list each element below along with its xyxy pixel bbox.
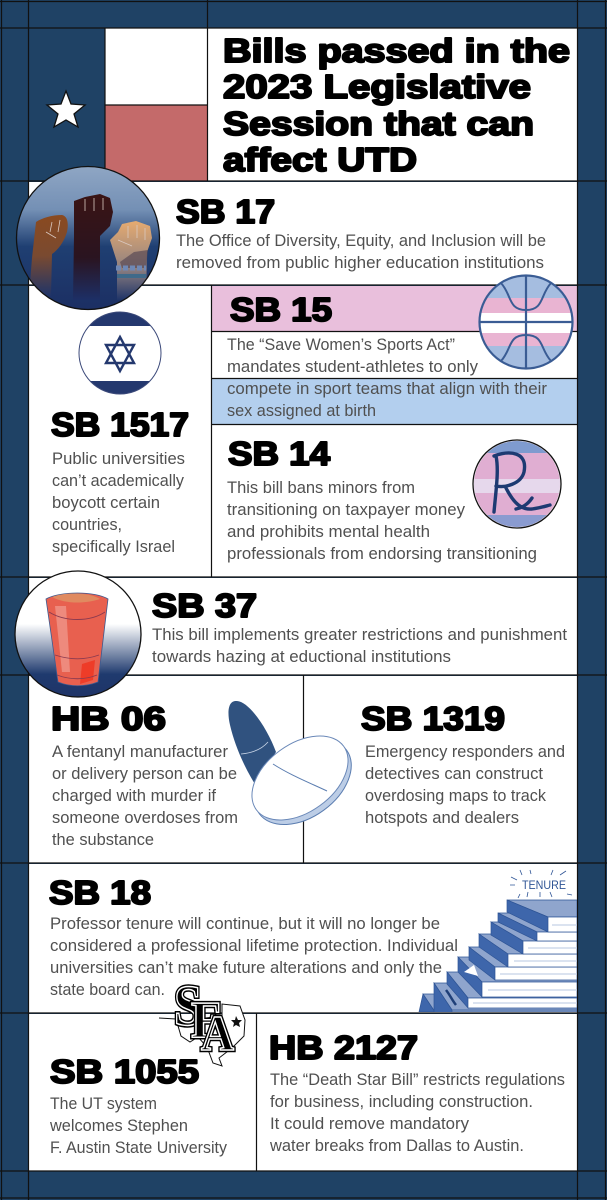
panel: HB 06: the substance bbox=[52, 830, 154, 849]
panel: SB 1319: hotspots and dealers bbox=[365, 808, 519, 827]
panel: SB 1055 bbox=[49, 1053, 227, 1157]
panel: title: Session that can bbox=[223, 105, 534, 142]
icon: star bbox=[47, 91, 85, 127]
panel: title bbox=[208, 28, 577, 181]
panel: HB 2127: It could remove mandatory bbox=[270, 1114, 469, 1133]
panel: SB 18: state board can. bbox=[50, 980, 165, 999]
panel: Texas flag bbox=[47, 28, 207, 181]
panel: title: affect UTD bbox=[223, 141, 417, 178]
panel: title: Bills passed in the bbox=[223, 32, 570, 69]
icon: SFA logo: A bbox=[201, 1005, 234, 1061]
icon: SFA logo bbox=[159, 973, 245, 1066]
panel: SB 14: This bill bans minors from bbox=[227, 478, 415, 497]
icon: SFA logo: F bbox=[191, 992, 221, 1049]
panel: SB 1517 bbox=[51, 305, 189, 556]
panel: SB 17: The Office of Diversity, Equity, and Inclusion will be bbox=[176, 231, 546, 250]
panel: SB 37: towards hazing at eductional institutions bbox=[152, 647, 451, 666]
panel: SB 15: SB 15 bbox=[230, 291, 332, 328]
panel: SB 14 bbox=[227, 435, 565, 563]
panel: HB 06: HB 06 bbox=[51, 700, 166, 737]
panel: SB 17: removed from public higher education institutions bbox=[176, 253, 544, 272]
panel: SB 14: professionals from endorsing transitioning bbox=[227, 544, 537, 563]
panel: HB 06: someone overdoses from bbox=[52, 808, 238, 827]
panel: SB 1517: can’t academically bbox=[52, 471, 184, 490]
icon: stack of books with tenure bbox=[419, 870, 577, 1013]
panel: SB 14: SB 14 bbox=[228, 435, 331, 472]
panel: title: 2023 Legislative bbox=[223, 68, 531, 105]
icon: SFA logo: S bbox=[174, 973, 202, 1038]
panel: SB 37: SB 37 bbox=[152, 587, 257, 624]
panel: SB 14: and prohibits mental health bbox=[227, 522, 430, 541]
panel: HB 2127 bbox=[269, 1029, 565, 1155]
panel: SB 18: universities can’t make future alterations and only the bbox=[50, 958, 442, 977]
panel: SB 1319: SB 1319 bbox=[361, 700, 505, 737]
panel: HB 2127: HB 2127 bbox=[269, 1029, 418, 1066]
panel: SB 15: The “Save Women’s Sports Act” bbox=[227, 335, 455, 354]
panel: SB 1517: countries, bbox=[52, 515, 122, 534]
panel: HB 2127: water breaks from Dallas to Austin. bbox=[269, 1136, 524, 1155]
panel: SB 15 bbox=[227, 276, 574, 420]
panel: SB 18: considered a professional lifetime protection. Individual bbox=[50, 936, 458, 955]
panel: SB 15: mandates student-athletes to only bbox=[227, 357, 478, 376]
icon: Rx symbol bbox=[470, 440, 565, 530]
panel: HB 2127: for business, including construction. bbox=[270, 1092, 533, 1111]
bottom-most book first bbox=[423, 994, 577, 1012]
panel: SB 18: Professor tenure will continue, but it will no longer be bbox=[50, 914, 440, 933]
icon: SFA logo: A bbox=[201, 1005, 234, 1061]
icon: raised fists bbox=[16, 166, 160, 310]
panel: SB 18 bbox=[49, 874, 458, 999]
panel: HB 2127: The “Death Star Bill” restricts regulations bbox=[270, 1070, 565, 1089]
panel: SB 1517: specifically Israel bbox=[52, 537, 175, 556]
panel: SB 17 bbox=[16, 166, 546, 310]
panel: SB 15: sex assigned at birth bbox=[227, 401, 376, 420]
panel: SB 1055: F. Austin State University bbox=[50, 1138, 227, 1157]
panel: SB 1055: The UT system bbox=[50, 1094, 157, 1113]
panel: SB 1319: overdosing maps to track bbox=[365, 786, 546, 805]
panel: SB 1055: SB 1055 bbox=[50, 1053, 199, 1090]
panel: HB 06 bbox=[51, 700, 238, 849]
panel: SB 1319: Emergency responders and bbox=[365, 742, 565, 761]
panel: SB 17: SB 17 bbox=[176, 193, 275, 230]
text: tenure: TENURE bbox=[522, 878, 566, 892]
panel: SB 37 bbox=[15, 571, 567, 697]
icon: pills bbox=[228, 701, 367, 842]
icon: SFA logo: F bbox=[191, 992, 221, 1049]
icon: Israel flag bbox=[78, 312, 162, 394]
panel: white rows bbox=[29, 182, 577, 1171]
panel: SB 37: This bill implements greater restrictions and punishment bbox=[152, 625, 567, 644]
panel: SB 1055: welcomes Stephen bbox=[49, 1116, 188, 1135]
panel: SB 1517: Public universities bbox=[52, 449, 185, 468]
panel: SB 1517: boycott certain bbox=[52, 493, 160, 512]
panel: HB 06: A fentanyl manufacturer bbox=[52, 742, 228, 761]
icon: basketball bbox=[478, 276, 574, 368]
panel: HB 06: or delivery person can be bbox=[52, 764, 237, 783]
icon: red cup bbox=[15, 571, 141, 697]
panel: SB 1517: SB 1517 bbox=[51, 406, 189, 443]
panel: SB 14: transitioning on taxpayer money bbox=[227, 500, 465, 519]
panel: HB 06: charged with murder if bbox=[52, 786, 216, 805]
panel: SB 1319 bbox=[361, 700, 565, 827]
panel: SB 1319: detectives can construct bbox=[365, 764, 543, 783]
panel: SB 18: SB 18 bbox=[49, 874, 151, 911]
panel: SB 15: compete in sport teams that align with their bbox=[227, 379, 547, 398]
icon: SFA logo: S bbox=[174, 973, 202, 1038]
